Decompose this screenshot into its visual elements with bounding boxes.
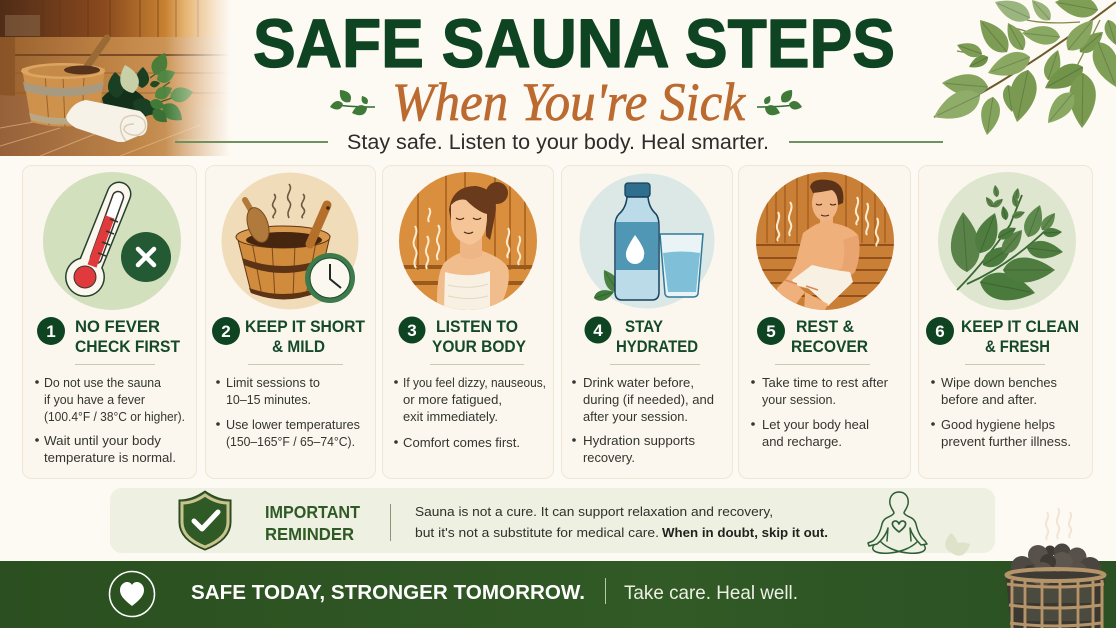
bullets 3: Comfort comes first. [403, 436, 520, 450]
tagline rule right [789, 141, 943, 143]
heading 3: YOUR BODY [432, 337, 527, 356]
number badge 2 [212, 317, 240, 345]
heading 1: NO FEVER [75, 317, 160, 336]
bullets 1 [35, 376, 185, 465]
heading 2: & MILD [272, 337, 325, 356]
heading 5: RECOVER [791, 337, 868, 356]
bullets 4: during (if needed), and [583, 393, 714, 407]
bullets 5: Let your body heal [762, 418, 869, 432]
reminder text [415, 504, 828, 540]
icon: sauna stones basket [1006, 544, 1105, 628]
bullets 2: Use lower temperatures [226, 418, 360, 432]
bullets 2: Limit sessions to [226, 376, 320, 390]
heading 1: CHECK FIRST [75, 337, 181, 356]
heading 4: HYDRATED [616, 337, 698, 356]
banner tagline: Take care. Heal well. [624, 582, 798, 604]
panel: important reminder [110, 488, 995, 559]
bullets 2: 10–15 minutes. [226, 393, 311, 407]
reminder heading [265, 502, 360, 544]
icon: woman relaxing in sauna [399, 172, 538, 310]
heading 2 [245, 317, 366, 356]
bullets 3: exit immediately. [403, 410, 498, 424]
panel: step 2 keep it short and mild [206, 166, 376, 478]
number badge 6 [926, 317, 954, 345]
bottom banner [0, 561, 1116, 628]
heading 5: REST & [796, 317, 854, 336]
number badge 1 [37, 317, 65, 345]
wooden bucket [21, 38, 107, 127]
bullets 1: Do not use the sauna [44, 376, 161, 390]
bullets 4: Drink water before, [583, 376, 694, 390]
panel: step 6 keep it clean and fresh [918, 166, 1092, 478]
heading 5 [791, 317, 868, 356]
bullets 6 [931, 376, 1071, 449]
icon: thermometer with x badge [43, 172, 181, 310]
icon: green sprig [938, 172, 1076, 310]
bullets 5 [751, 376, 888, 449]
title: SAFE SAUNA STEPS [253, 5, 895, 82]
heading 6: KEEP IT CLEAN [961, 317, 1079, 336]
bullets 6: Good hygiene helps [941, 418, 1055, 432]
tagline: Stay safe. Listen to your body. Heal smarter. [347, 131, 769, 154]
icon: shield with check [179, 491, 231, 550]
icon: wooden bucket and clock [222, 172, 358, 310]
bullets 5: your session. [762, 393, 836, 407]
reminder text: but it's not a substitute for medical care. [415, 525, 659, 540]
top right leafy branch [929, 0, 1116, 136]
bullets 2: (150–165°F / 65–74°C). [226, 435, 355, 449]
bullets 2 [216, 376, 360, 449]
bullets 1: if you have a fever [44, 393, 145, 407]
number badge 5: 5 [766, 322, 776, 341]
reminder heading: IMPORTANT [265, 502, 360, 522]
panel: step 5 rest and recover [738, 166, 910, 478]
bullets 4 [572, 376, 714, 465]
number badge 6: 6 [935, 322, 945, 341]
heading 6: & FRESH [985, 337, 1050, 356]
icon: water bottle and glass [580, 174, 714, 308]
bullets 6: Wipe down benches [941, 376, 1057, 390]
icon: heart in circle [110, 572, 154, 616]
bullets 3: or more fatigued, [403, 393, 502, 407]
reminder text: When in doubt, skip it out. [662, 525, 828, 540]
heading 4 [616, 317, 698, 356]
reminder text: Sauna is not a cure. It can support relaxation and recovery, [415, 504, 773, 519]
panel: step 4 stay hydrated [562, 166, 732, 478]
banner slogan: SAFE TODAY, STRONGER TOMORROW. [191, 581, 585, 604]
bullets 6: before and after. [941, 393, 1037, 407]
bullets 5: and recharge. [762, 435, 842, 449]
bullets 3 [394, 376, 546, 450]
number badge 3: 3 [407, 321, 417, 340]
bullets 3: If you feel dizzy, nauseous, [403, 376, 546, 390]
number badge 3 [398, 316, 426, 344]
heading 1 [75, 317, 181, 356]
number badge 5 [757, 317, 785, 345]
number badge 1: 1 [46, 322, 56, 341]
heading 4: STAY [625, 317, 664, 336]
panel: step 1 no fever check first [22, 166, 196, 478]
green leaves bundle [98, 50, 195, 128]
icon: faint steam [1046, 508, 1071, 540]
bullets 1: (100.4°F / 38°C or higher). [44, 410, 185, 424]
heading 3 [432, 317, 527, 356]
reminder heading: REMINDER [265, 524, 354, 544]
number badge 2: 2 [221, 322, 231, 341]
panel: step 3 listen to your body [382, 166, 554, 478]
header photo: sauna bucket and towel [0, 0, 232, 156]
bullets 1: Wait until your body [44, 434, 162, 448]
bullets 1: temperature is normal. [44, 451, 176, 465]
icon: meditating figure with heart [868, 492, 927, 553]
bullets 4: Hydration supports [583, 434, 695, 448]
rolled towel [66, 100, 147, 142]
heading 6 [961, 317, 1079, 356]
icon: man resting in sauna [755, 172, 895, 314]
bullets 4: after your session. [583, 410, 688, 424]
icon: left sprig [329, 87, 375, 118]
heading 3: LISTEN TO [436, 317, 518, 336]
tagline rule left [175, 141, 328, 143]
subtitle: When You're Sick [392, 72, 746, 132]
icon: right sprig [757, 87, 803, 118]
number badge 4 [584, 316, 612, 344]
heading 2: KEEP IT SHORT [245, 317, 366, 336]
bullets 5: Take time to rest after [762, 376, 888, 390]
bullets 6: prevent further illness. [941, 435, 1071, 449]
icon: faint leaf [945, 533, 973, 559]
bullets 4: recovery. [583, 451, 635, 465]
number badge 4: 4 [593, 321, 603, 340]
